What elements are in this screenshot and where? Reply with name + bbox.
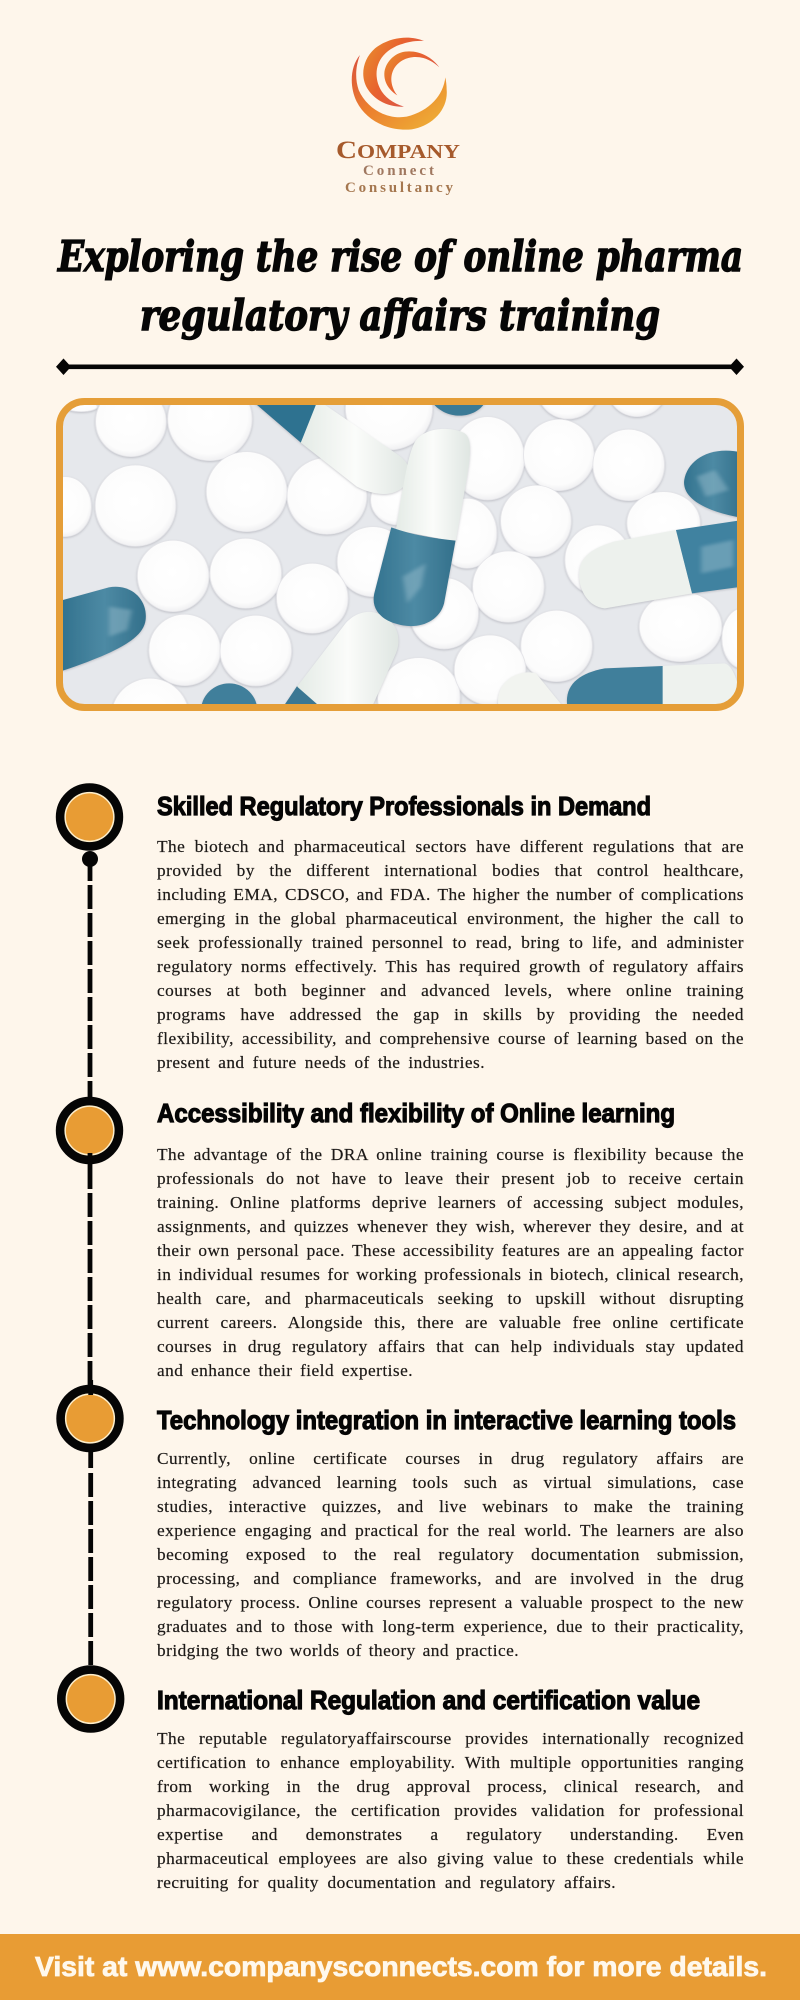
photo: white tablets and teal capsules in orange frame <box>56 398 744 711</box>
text block: section 2 body: professionals do not have to leave their present job to receive certain <box>157 1168 744 1188</box>
text block: section 4 body: pharmacovigilance, the certification provides validation for professional <box>157 1801 744 1820</box>
text block: section 2 body: their own personal pace. These accessibility features are an appealing factor <box>157 1240 744 1260</box>
text block: section 3 body: becoming exposed to the real regulatory documentation submission, <box>157 1545 744 1564</box>
title: regulatory affairs training <box>140 291 660 340</box>
text block: section 3 body: experience engaging and practical for the real world. The learners are also <box>157 1521 744 1540</box>
text block: section 3 body: integrating advanced learning tools such as virtual simulations, case <box>157 1473 744 1492</box>
text block: section 1 body: programs have addressed the gap in skills by providing the needed <box>157 1005 744 1024</box>
text block: section 2 body: and enhance their field expertise. <box>157 1360 413 1380</box>
text block: section 4 body: from working in the drug approval process, clinical research, and <box>157 1777 744 1796</box>
text block: section 1 body <box>157 837 744 1072</box>
marker 1 <box>60 788 119 867</box>
text block: section 2 body: The advantage of the DRA online training course is flexibility because the <box>157 1144 744 1164</box>
text block: section 3 body: studies, interactive quizzes, and live webinars to make the training <box>157 1497 744 1516</box>
text block: section 2 body: assignments, and quizzes whenever they wish, wherever they desire, and at <box>157 1216 744 1236</box>
title divider with diamond ends <box>56 358 744 375</box>
logo wordmark: COMPANY: COMPANY <box>336 137 461 164</box>
text block: section 1 body: flexibility, accessibility, and comprehensive course of learning based on the <box>157 1029 744 1048</box>
text block: section 2 body: courses in drug regulatory affairs that can help individuals stay updated <box>157 1336 744 1356</box>
logo wordmark: Consultancy: Consultancy <box>345 180 454 196</box>
text block: section 2 body <box>157 1144 744 1380</box>
text block: section 4 body: certification to enhance employability. With multiple opportunities ranging <box>157 1753 744 1772</box>
text block: section 3 body: bridging the two worlds of theory and practice. <box>157 1641 519 1660</box>
capsule highlights <box>109 470 733 637</box>
text block: section 2 body: training. Online platforms deprive learners of accessing subject modules, <box>157 1192 744 1212</box>
heading: section 1: Skilled Regulatory Professionals in Demand <box>157 791 651 821</box>
text block: section 4 body <box>157 1729 744 1892</box>
heading: section 2: Accessibility and flexibility of Online learning <box>157 1098 675 1128</box>
footer call-to-action band <box>0 1934 800 2000</box>
logo wordmark: Connect: Connect <box>363 163 434 179</box>
text block: section 1 body: present and future needs of the industries. <box>157 1053 485 1072</box>
text block: section 3 body: graduates and to those with long-term experience, due to their practicality, <box>157 1617 744 1636</box>
text block: section 3 body: processing, and compliance frameworks, and are involved in the drug <box>157 1569 744 1588</box>
text block: section 1 body: The biotech and pharmaceutical sectors have different regulations that are <box>157 837 744 856</box>
text block: section 2 body: health care, and pharmaceuticals seeking to upskill without disrupting <box>157 1288 744 1308</box>
marker 4 <box>61 1670 120 1728</box>
text block: section 1 body: courses at both beginner and advanced levels, where online training <box>157 981 744 1000</box>
text block: section 4 body: recruiting for quality documentation and regulatory affairs. <box>157 1873 616 1892</box>
text block: section 1 body: provided by the different international bodies that control healthcare, <box>157 861 744 880</box>
text block: section 1 body: emerging in the global pharmaceutical environment, the higher the call to <box>157 909 744 928</box>
heading: section 3: Technology integration in interactive learning tools <box>157 1405 736 1435</box>
timeline: dashed vertical connector and four markers <box>60 788 120 1728</box>
marker 3 <box>61 1380 119 1468</box>
text block: section 4 body: expertise and demonstrates a regulatory understanding. Even <box>157 1825 744 1844</box>
icon: inner crescent <box>384 51 439 95</box>
text block: section 1 body: seek professionally trained personnel to read, bring to life, and administer <box>157 933 744 952</box>
heading: section 4: International Regulation and certification value <box>157 1685 700 1715</box>
text block: section 4 body: pharmaceutical employees are also giving value to these credentials while <box>157 1849 744 1868</box>
marker 2 <box>60 1101 119 1188</box>
text block: section 2 body: in individual resumes for working professionals in biotech, clinical research, <box>157 1264 744 1284</box>
logo: Company Connect Consultancy <box>336 38 461 196</box>
text block: section 3 body: regulatory process. Online courses represent a valuable prospect to the new <box>157 1593 744 1612</box>
text block: section 4 body: The reputable regulatoryaffairscourse provides internationally recognized <box>157 1729 744 1748</box>
title <box>57 232 743 340</box>
icon: outer crescent <box>352 55 447 130</box>
footer call-to-action band: Visit at www.companysconnects.com for more details. <box>35 1951 767 1982</box>
text block: section 2 body: current careers. Alongside this, there are valuable free online certificate <box>157 1312 744 1332</box>
text block: section 3 body: Currently, online certificate courses in drug regulatory affairs are <box>157 1449 744 1468</box>
text block: section 1 body: including EMA, CDSCO, and FDA. The higher the number of complications <box>157 885 744 904</box>
text block: section 3 body <box>156 1449 744 1660</box>
text block: section 1 body: regulatory norms effectively. This has required growth of regulatory affairs <box>157 957 744 976</box>
icon: middle crescent <box>363 38 424 107</box>
